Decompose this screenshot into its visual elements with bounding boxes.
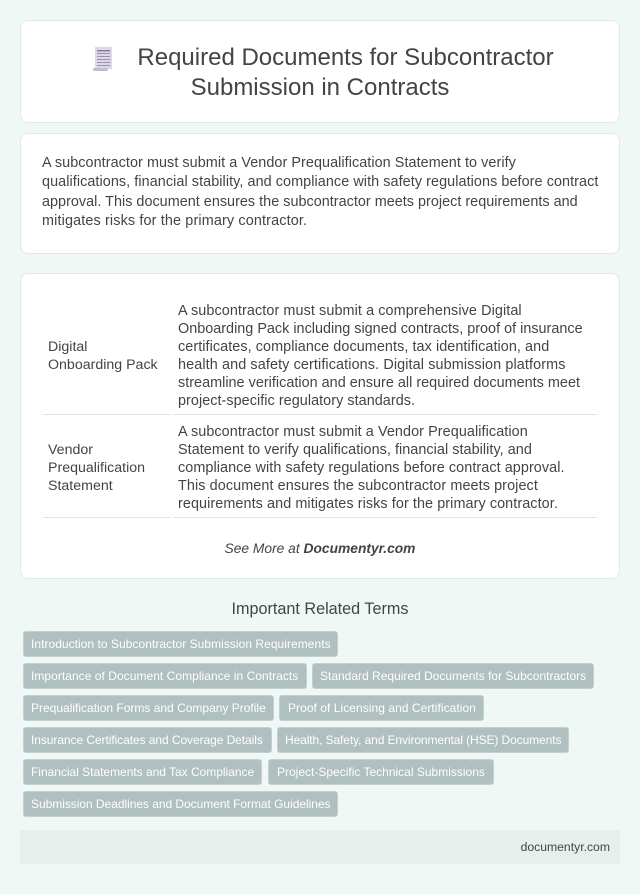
row text: Vendor Prequalification Statement: compliance with safety regulations before contract approval. bbox=[178, 460, 565, 476]
row text: Digital Onboarding Pack: streamline verification and ensure all required documents meet bbox=[178, 375, 580, 391]
row text: Digital Onboarding Pack: Onboarding Pack including signed contracts, proof of insurance bbox=[178, 321, 583, 337]
title: Required Documents for Subcontractor bbox=[137, 44, 554, 71]
row text: Vendor Prequalification Statement bbox=[178, 424, 565, 512]
tag list: Introduction to Subcontractor Submission Requirements bbox=[31, 637, 331, 651]
row label: Digital Onboarding Pack: Digital bbox=[48, 339, 87, 355]
row label: Digital Onboarding Pack bbox=[48, 339, 158, 373]
tag list: Financial Statements and Tax Compliance bbox=[31, 765, 254, 779]
tag list: Project-Specific Technical Submissions bbox=[277, 765, 485, 779]
row label: Vendor Prequalification Statement bbox=[48, 442, 145, 494]
row text: Digital Onboarding Pack: certificates, compliance documents, tax identification, and bbox=[178, 339, 549, 355]
summary text: qualifications, financial stability, and compliance with safety regulations before contract bbox=[42, 174, 598, 190]
footer text: documentyr.com bbox=[521, 840, 610, 854]
tag list: Prequalification Forms and Company Profile bbox=[31, 701, 266, 715]
row text: Vendor Prequalification Statement: Statement to verify qualifications, financial stability, and bbox=[178, 442, 532, 458]
tag list: Insurance Certificates and Coverage Details bbox=[31, 733, 263, 747]
row text: Vendor Prequalification Statement: requirements and mitigates risks for the primary contractor. bbox=[178, 496, 558, 512]
row text: Digital Onboarding Pack bbox=[178, 303, 583, 409]
tag list: Health, Safety, and Environmental (HSE) Documents bbox=[285, 733, 561, 747]
title bbox=[137, 44, 554, 101]
panel: document table bbox=[20, 273, 620, 579]
row text: Vendor Prequalification Statement: This document ensures the subcontractor meets project bbox=[178, 478, 538, 494]
row label: Vendor Prequalification Statement: Vendor bbox=[48, 442, 93, 458]
row text: Vendor Prequalification Statement: A subcontractor must submit a Vendor Prequalification bbox=[178, 424, 528, 440]
tag list: Standard Required Documents for Subcontractors bbox=[320, 669, 586, 683]
summary text bbox=[42, 155, 598, 229]
icon: document scroll bbox=[93, 47, 112, 71]
title: Submission in Contracts bbox=[191, 74, 449, 101]
row text: Digital Onboarding Pack: project-specific regulatory standards. bbox=[178, 393, 415, 409]
summary text: mitigates risks for the primary contractor. bbox=[42, 213, 307, 229]
row label: Vendor Prequalification Statement: Prequalification bbox=[48, 460, 145, 476]
footer bbox=[20, 830, 620, 864]
row text: Digital Onboarding Pack: health and safety certifications. Digital submission platforms bbox=[178, 357, 566, 373]
row text: Digital Onboarding Pack: A subcontractor must submit a comprehensive Digital bbox=[178, 303, 522, 319]
panel: header bbox=[20, 20, 620, 123]
row label: Vendor Prequalification Statement: Statement bbox=[48, 478, 113, 494]
tag list bbox=[23, 631, 594, 817]
summary text: approval. This document ensures the subcontractor meets project requirements and bbox=[42, 194, 578, 210]
tag list: Importance of Document Compliance in Contracts bbox=[31, 669, 298, 683]
row label: Digital Onboarding Pack: Onboarding Pack bbox=[48, 357, 158, 373]
see more link: See More at Documentyr.com bbox=[225, 541, 415, 556]
panel: summary bbox=[20, 133, 620, 254]
heading: related terms: Important Related Terms bbox=[232, 600, 408, 618]
summary text: A subcontractor must submit a Vendor Prequalification Statement to verify bbox=[42, 155, 516, 171]
tag list: Submission Deadlines and Document Format Guidelines bbox=[31, 797, 330, 811]
tag list: Proof of Licensing and Certification bbox=[288, 701, 476, 715]
